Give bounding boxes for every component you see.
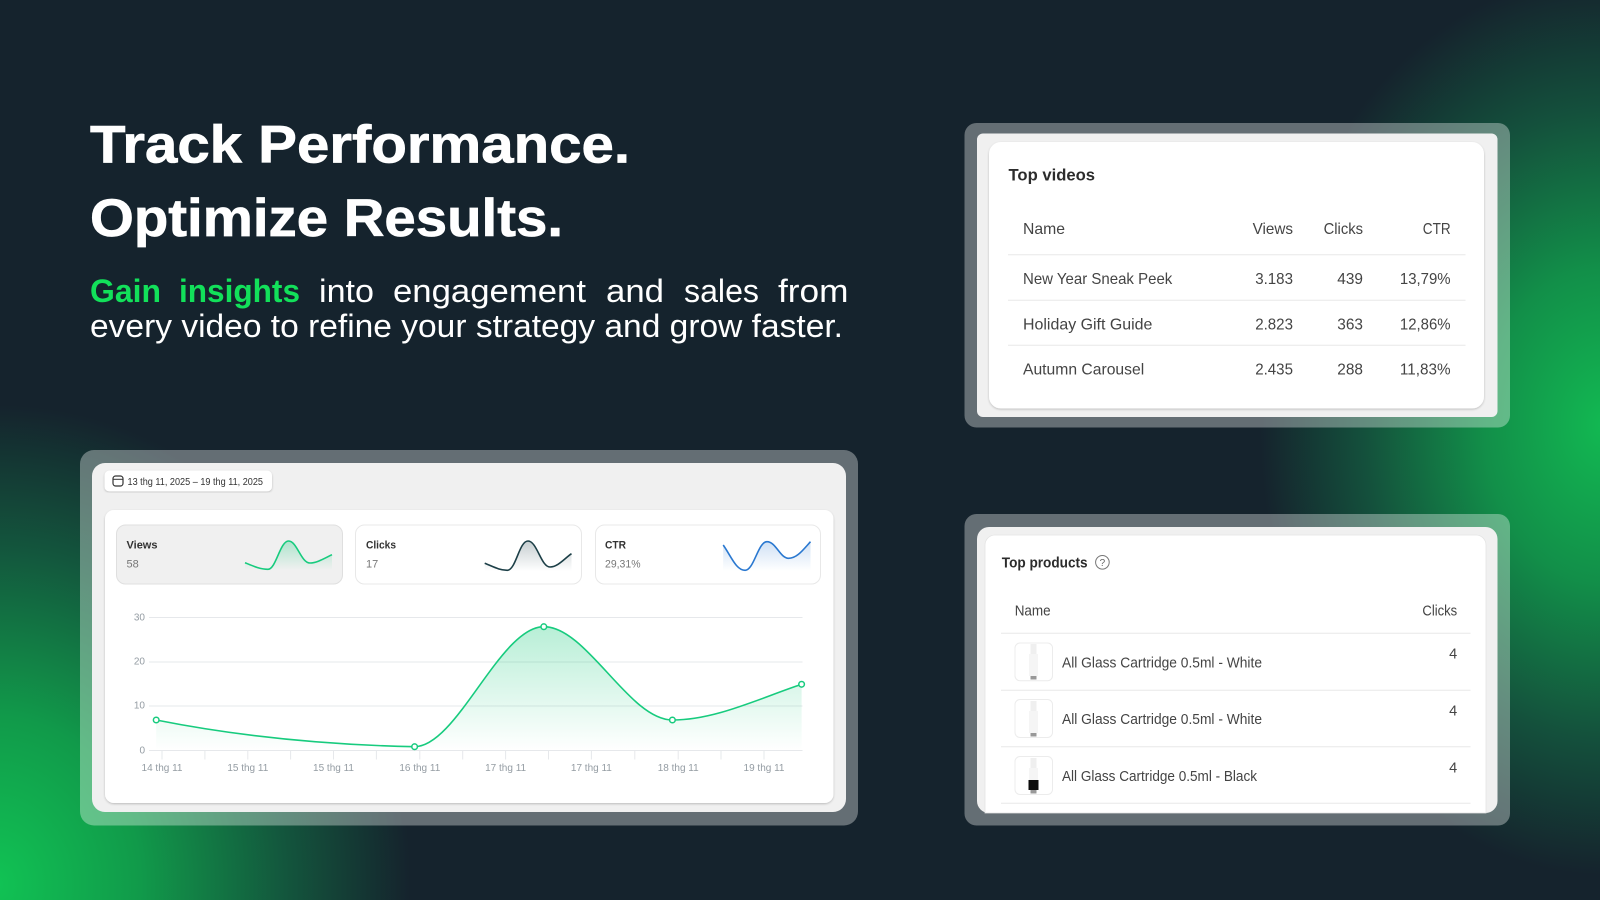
title bbox=[90, 116, 630, 248]
icon: help: ? bbox=[1100, 558, 1106, 569]
product row 2: 4 bbox=[1449, 704, 1457, 720]
line chart: views over time bbox=[134, 612, 804, 774]
subtitle text block: sales bbox=[684, 273, 759, 309]
table: top videos: 11,83% bbox=[1400, 362, 1451, 379]
product row 3: All Glass Cartridge 0.5ml - Black bbox=[1062, 769, 1258, 785]
line chart: views over time: 20 bbox=[134, 656, 145, 668]
line chart: views over time: 18 thg 11 bbox=[658, 763, 699, 774]
product row 3 bbox=[1015, 756, 1457, 794]
panel: analytics chart bbox=[80, 450, 858, 826]
product row 1: All Glass Cartridge 0.5ml - White bbox=[1062, 655, 1262, 671]
white chart card bbox=[105, 510, 834, 803]
table: top videos: Holiday Gift Guide bbox=[1023, 316, 1152, 333]
table: top videos: 2.823 bbox=[1255, 316, 1293, 333]
kpi card: clicks: 17 bbox=[366, 559, 378, 571]
table: top products: Name bbox=[1015, 603, 1051, 619]
kpi card: views: Views bbox=[126, 540, 158, 552]
line chart: views over time: 14 thg 11 bbox=[142, 763, 183, 774]
table: top videos: 12,86% bbox=[1400, 316, 1451, 333]
date range pill bbox=[104, 470, 272, 492]
table: top products bbox=[1001, 603, 1470, 803]
subtitle text block: every video to refine your strategy and grow faster. bbox=[90, 308, 843, 344]
subtitle text block: insights bbox=[179, 273, 300, 309]
table: top videos: 2.435 bbox=[1255, 362, 1293, 379]
subtitle text block: from bbox=[778, 273, 848, 309]
subtitle text block: engagement bbox=[393, 273, 586, 309]
table: top videos: CTR bbox=[1423, 221, 1451, 238]
product row 2: All Glass Cartridge 0.5ml - White bbox=[1062, 712, 1262, 728]
product row 2 bbox=[1015, 700, 1457, 738]
table: top products: Clicks bbox=[1422, 603, 1457, 619]
product row 1 bbox=[1015, 643, 1457, 681]
line chart: views over time: 30 bbox=[134, 612, 145, 624]
table: top videos: 13,79% bbox=[1400, 271, 1451, 288]
kpi card: views bbox=[116, 525, 342, 584]
title: Optimize Results. bbox=[90, 189, 563, 248]
subtitle text block: and bbox=[606, 273, 664, 309]
table: top videos: 363 bbox=[1337, 316, 1363, 333]
line chart: views over time: 15 thg 11 bbox=[227, 763, 269, 774]
table: top videos: Autumn Carousel bbox=[1023, 362, 1144, 379]
table: top videos: 288 bbox=[1337, 362, 1363, 379]
subtitle text block: into bbox=[319, 273, 374, 309]
product row 1: 4 bbox=[1449, 647, 1457, 663]
kpi card: views: 58 bbox=[126, 559, 139, 571]
line chart: views over time: 16 thg 11 bbox=[399, 763, 441, 774]
panel: top videos bbox=[964, 123, 1510, 428]
kpi card: ctr: 29,31% bbox=[605, 559, 641, 571]
kpi card: clicks bbox=[356, 525, 582, 584]
date range pill: 13 thg 11, 2025 – 19 thg 11, 2025 bbox=[128, 477, 263, 488]
line chart: views over time: 17 thg 11 bbox=[571, 763, 612, 774]
line chart: views over time: 0 bbox=[139, 746, 145, 756]
table: top videos: Name bbox=[1023, 221, 1065, 238]
line chart: views over time: 17 thg 11 bbox=[485, 763, 527, 774]
kpi card: ctr bbox=[596, 525, 820, 584]
product row 3: 4 bbox=[1449, 761, 1457, 777]
panel: top products bbox=[964, 514, 1510, 826]
line chart: views over time: 10 bbox=[134, 700, 145, 712]
table: top videos: 439 bbox=[1337, 271, 1363, 288]
line chart: views over time: 19 thg 11 bbox=[744, 763, 785, 774]
table: top videos: Views bbox=[1253, 221, 1293, 238]
table: top videos bbox=[1008, 221, 1466, 379]
kpi card: ctr: CTR bbox=[605, 540, 626, 552]
title: Track Performance. bbox=[90, 116, 630, 174]
heading: top videos: Top videos bbox=[1008, 166, 1095, 185]
table: top videos: Clicks bbox=[1324, 221, 1363, 238]
icon: help bbox=[1096, 556, 1109, 569]
kpi card: clicks: Clicks bbox=[366, 540, 396, 552]
table: top videos: 3.183 bbox=[1255, 271, 1293, 288]
heading: top products: Top products bbox=[1002, 556, 1088, 572]
subtitle text block: Gain bbox=[90, 273, 161, 309]
subtitle text block bbox=[90, 273, 848, 344]
table: top videos: New Year Sneak Peek bbox=[1023, 271, 1173, 288]
line chart: views over time: 15 thg 11 bbox=[313, 763, 354, 774]
